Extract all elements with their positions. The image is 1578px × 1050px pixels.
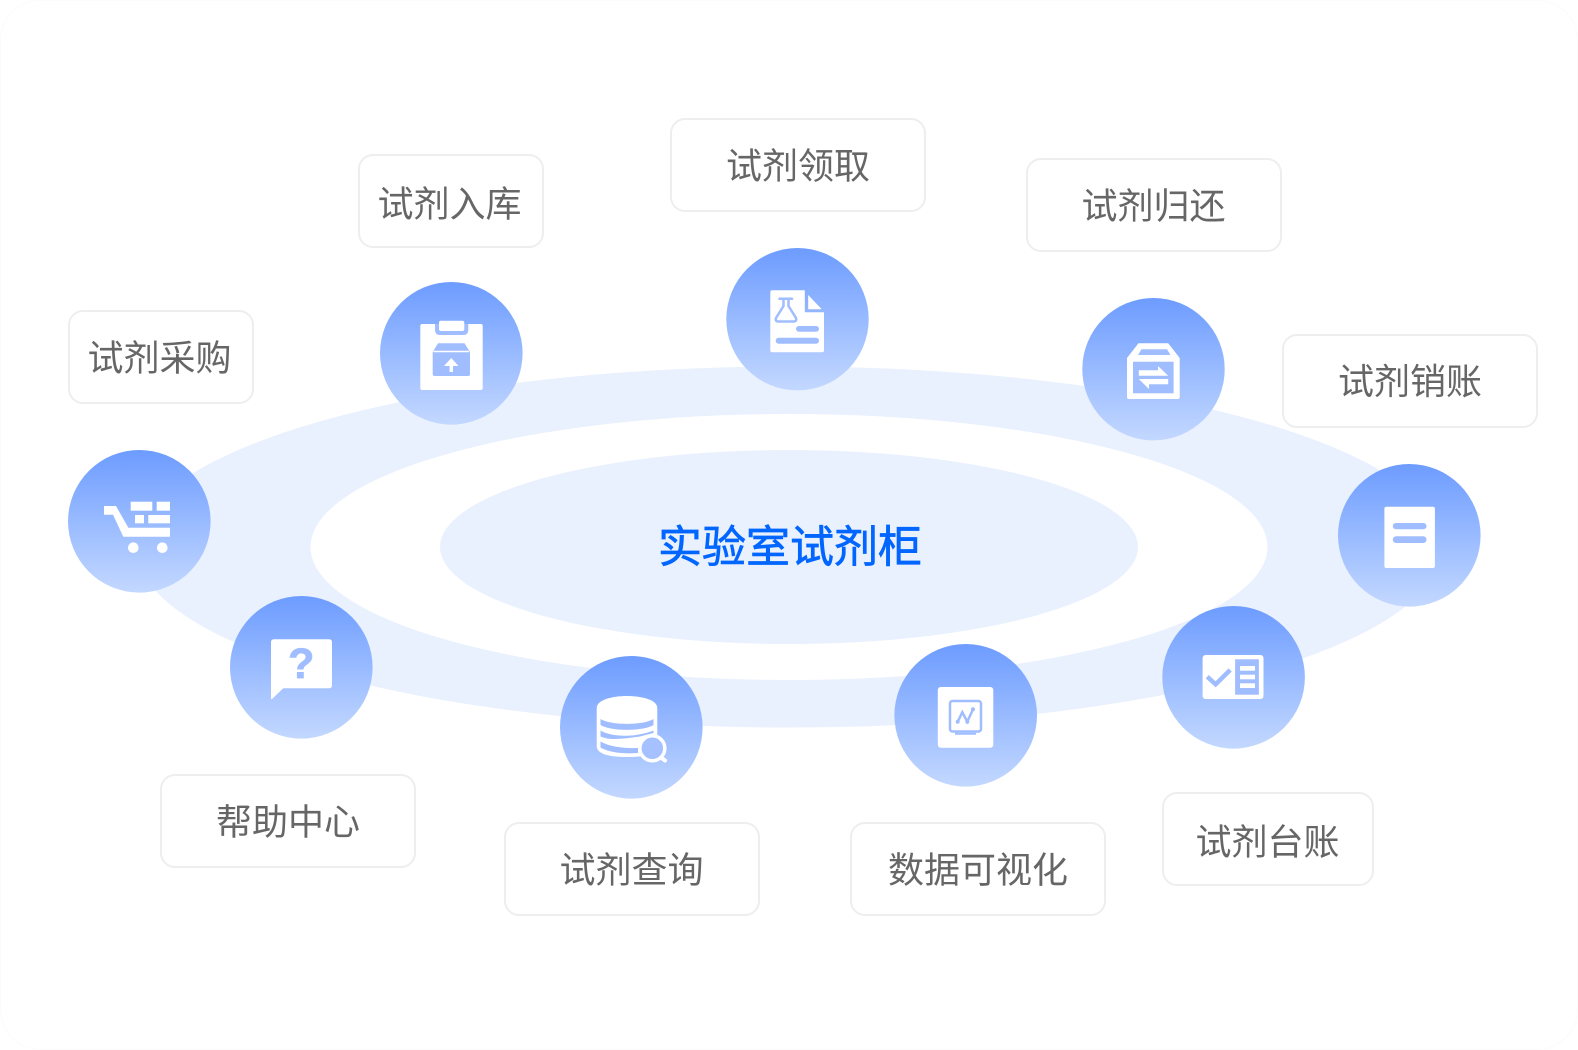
- icon: database search: [560, 656, 703, 799]
- icon: inbound clipboard box: [380, 282, 523, 425]
- label: 试剂销账: 试剂销账: [1338, 361, 1482, 402]
- label: 试剂入库: [359, 155, 543, 247]
- icon: write-off document: [1338, 464, 1481, 607]
- label: 试剂领取: [671, 119, 925, 211]
- icon: ledger checklist: [1162, 606, 1305, 749]
- icon: return box with arrows: [1082, 298, 1225, 440]
- label: 帮助中心: 帮助中心: [216, 802, 360, 842]
- label: 数据可视化: 数据可视化: [888, 850, 1068, 890]
- orbit ring: [136, 366, 1442, 728]
- center ellipse: 实验室试剂柜: [440, 450, 1138, 644]
- label: 试剂归还: [1027, 159, 1281, 251]
- label: 试剂入库: 试剂入库: [378, 184, 522, 224]
- label: 试剂归还: 试剂归还: [1082, 186, 1226, 226]
- icon: data chart tablet: [894, 644, 1037, 787]
- center ellipse: 实验室试剂柜: 实验室试剂柜: [658, 523, 922, 572]
- label: 试剂采购: 试剂采购: [88, 338, 232, 378]
- label: 试剂查询: 试剂查询: [560, 850, 704, 890]
- label: 帮助中心: [161, 775, 415, 867]
- label: 数据可视化: [851, 823, 1105, 915]
- label: 试剂台账: 试剂台账: [1196, 822, 1340, 862]
- icon: document with flask: [726, 248, 869, 390]
- icon: shopping cart: [68, 450, 211, 593]
- label: 试剂查询: [505, 823, 759, 915]
- label: 试剂台账: [1163, 793, 1373, 885]
- icon: help speech bubble: [230, 596, 373, 739]
- icon: help speech bubble: ?: [288, 640, 314, 688]
- label: 试剂采购: [69, 311, 253, 403]
- label: 试剂领取: 试剂领取: [726, 146, 870, 186]
- label: 试剂销账: [1283, 335, 1537, 427]
